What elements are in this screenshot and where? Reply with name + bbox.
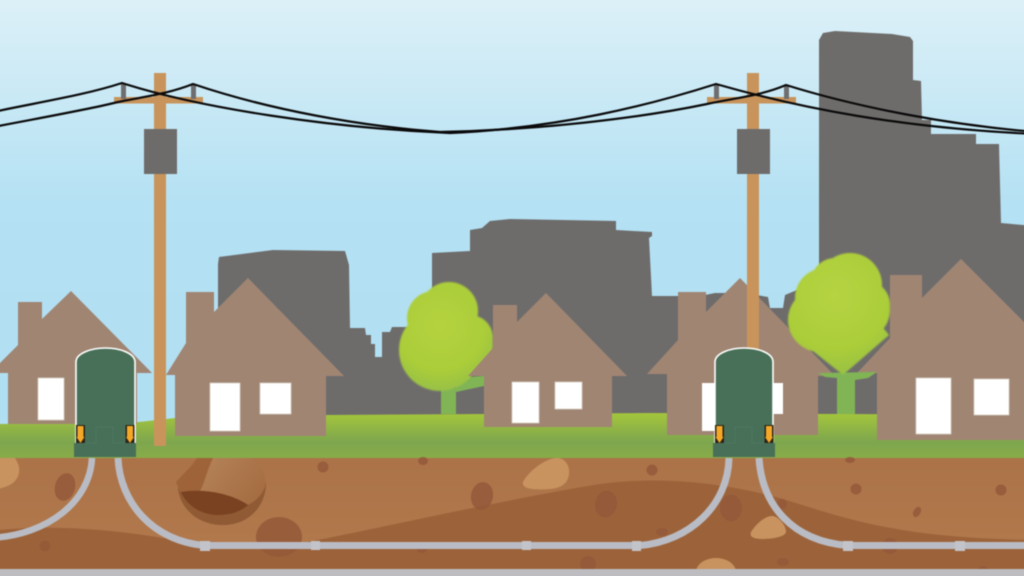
pole 2 right insulator (784, 85, 789, 99)
pole 1 transformer box (144, 129, 177, 174)
tree 1 trunk (441, 376, 484, 414)
warning arrow left (76, 425, 85, 443)
cable couplings (200, 541, 965, 551)
cabinet right base (713, 443, 775, 457)
main cable with bends (118, 458, 729, 546)
soil ground (0, 457, 1024, 576)
tree 1 canopy (399, 282, 493, 391)
house 4 (647, 278, 835, 435)
boulder shadow (178, 480, 266, 525)
house 5 (857, 259, 1024, 440)
warning arrow left (715, 425, 724, 443)
tree 2 (788, 253, 890, 414)
house 3 window (555, 382, 582, 409)
house 4 shape (647, 278, 835, 435)
house 2 window (260, 383, 291, 414)
house 5 window (974, 379, 1009, 415)
ground cabinet left (74, 348, 136, 457)
cabinet left body (76, 348, 135, 444)
house 1 (0, 291, 152, 424)
right cable (759, 458, 1024, 546)
house 2 (166, 278, 344, 436)
house 2 door (210, 383, 240, 431)
house 4 window (752, 383, 783, 414)
pole 1 crossarm (114, 97, 203, 104)
bottom grey strip (0, 569, 1024, 576)
warning arrow right (126, 425, 134, 443)
tree 2 canopy (788, 253, 890, 375)
cabinet left base (74, 443, 136, 457)
pole 1 post (154, 73, 166, 446)
ground cabinet right (713, 348, 775, 457)
sky (0, 0, 1024, 420)
utility pole 1 (114, 73, 203, 446)
city skyline silhouette (218, 31, 1024, 415)
lower dark soil layer (0, 480, 1024, 570)
house 5 door (916, 378, 951, 434)
overhead power lines (0, 83, 1024, 134)
house 2 shape (166, 278, 344, 436)
pole 1 left insulator (121, 84, 126, 99)
boulder left facet (176, 458, 213, 492)
house 1 door (38, 378, 64, 420)
house 3 shape (468, 293, 627, 427)
boulder dark hollow (181, 491, 248, 515)
tree 2 trunk (818, 372, 877, 414)
house 3 door (512, 382, 539, 423)
house 5 shape (857, 259, 1024, 440)
dark rocks and pebbles (40, 457, 1006, 576)
grass strip (0, 413, 1024, 458)
cabinet right body (715, 348, 773, 444)
house 4 door (702, 383, 732, 431)
cabinet left door notch (84, 427, 125, 443)
pole 1 right insulator (191, 85, 196, 99)
upper soil layer (0, 458, 1024, 570)
utility pole 2 (707, 73, 796, 363)
pole 2 crossarm (707, 97, 796, 104)
warning arrow right (764, 425, 774, 443)
pole 2 left insulator (714, 84, 719, 99)
underground cables (0, 458, 1024, 551)
cabinet right door notch (723, 427, 764, 443)
pole 2 transformer box (737, 129, 770, 174)
boulder sphere (200, 458, 265, 505)
tree 1 (399, 282, 493, 414)
pole 2 post (747, 73, 759, 363)
buried boulder (176, 458, 266, 525)
house 1 shape (0, 291, 152, 424)
left service cable (0, 458, 92, 538)
house 3 (468, 293, 627, 427)
light rocks (0, 458, 786, 576)
